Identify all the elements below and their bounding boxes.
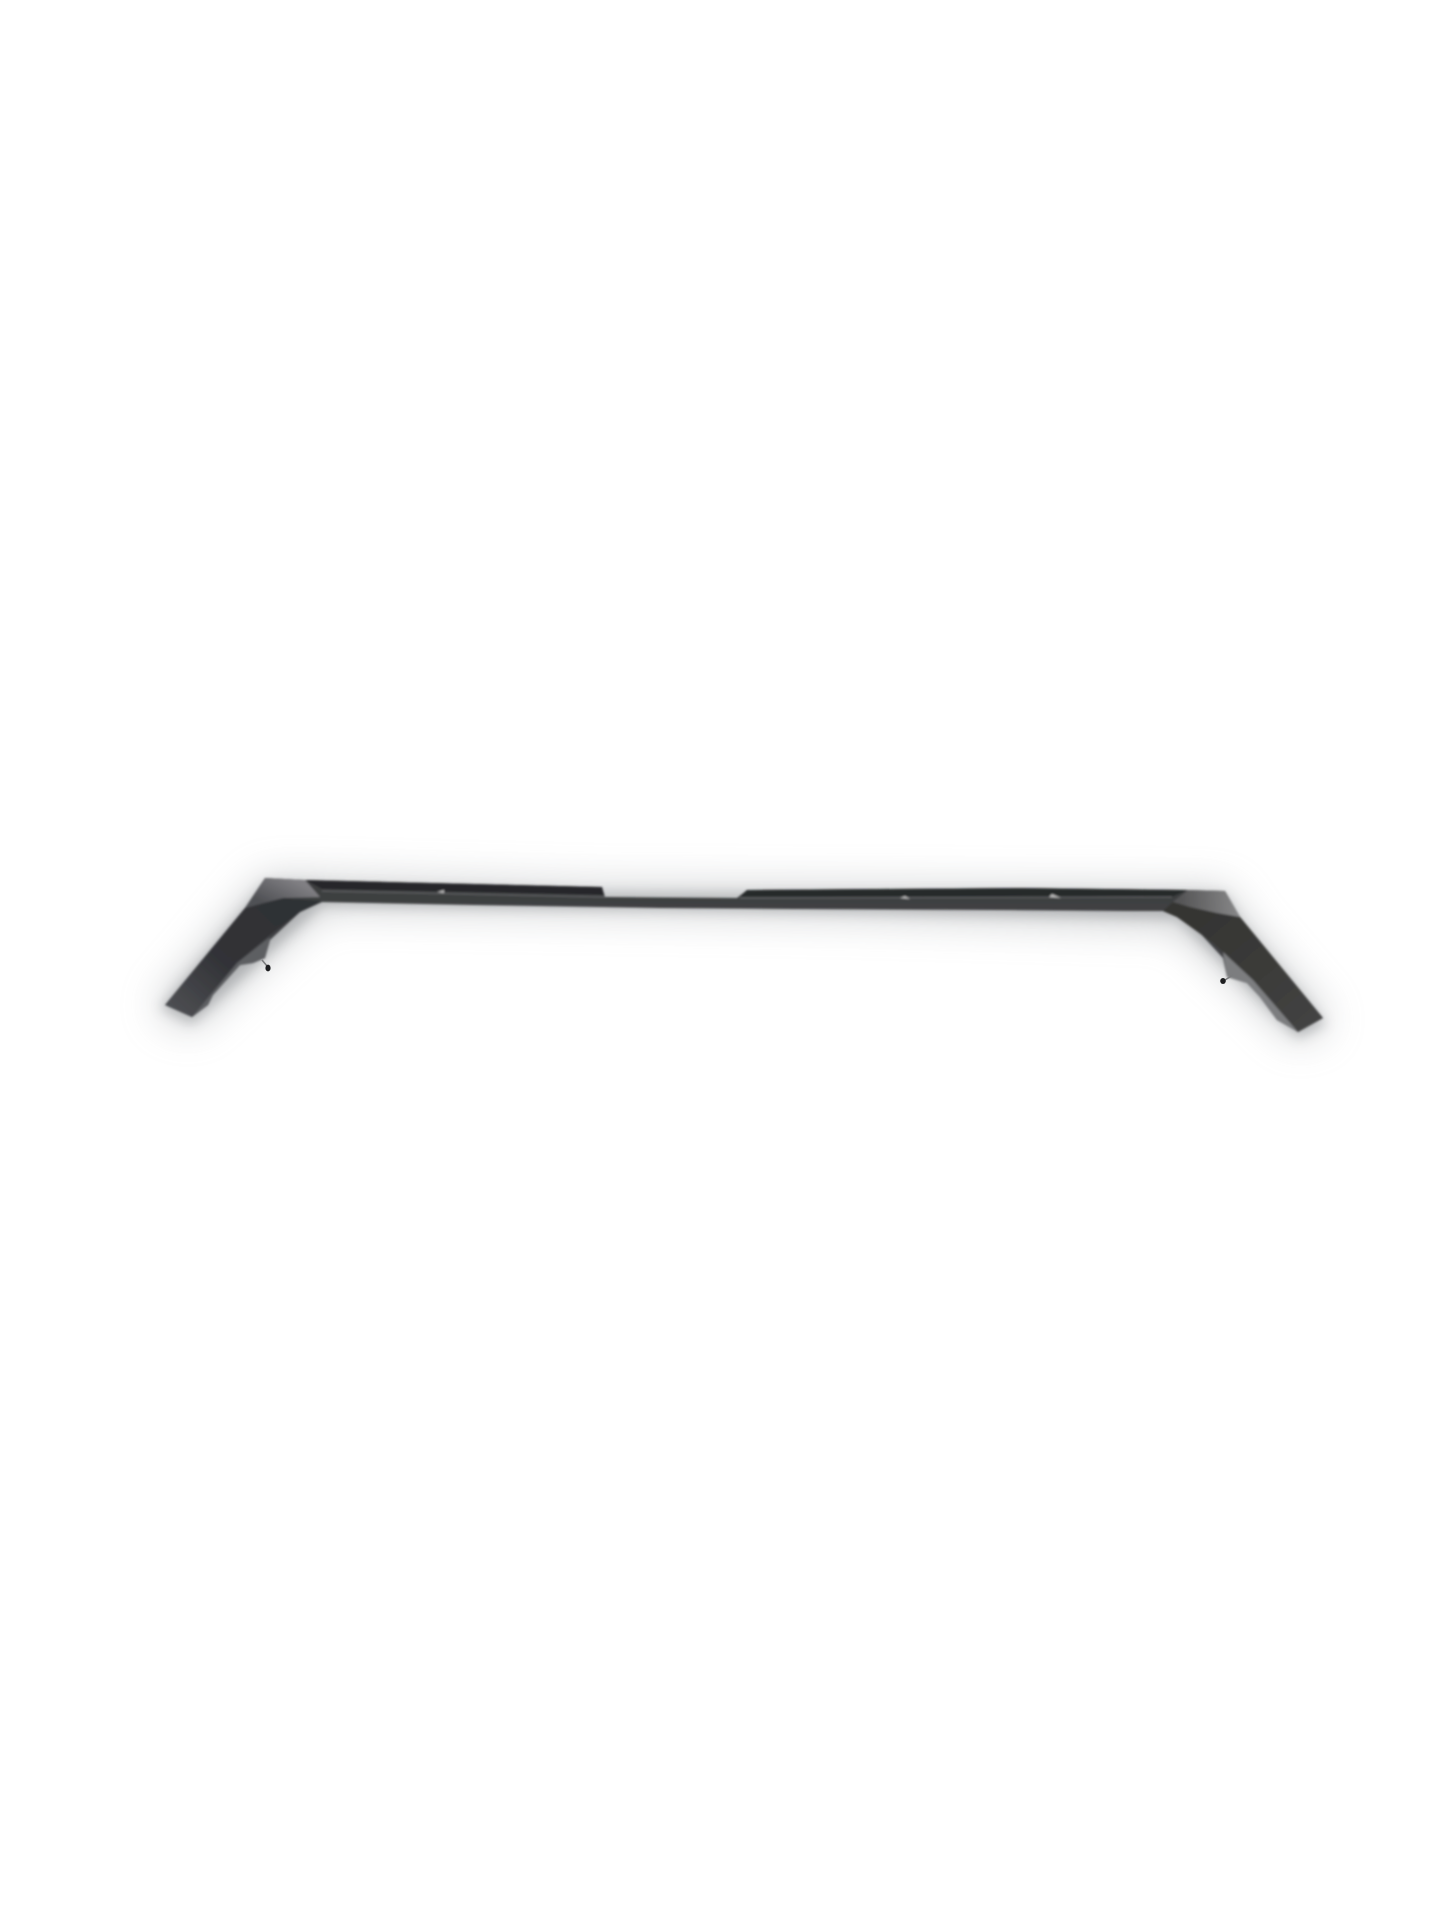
left arm flange (192, 937, 270, 1017)
soft shadow (155, 878, 1330, 1042)
trim bar (165, 878, 1323, 1032)
highlights (322, 891, 1172, 898)
clip markers (437, 890, 1061, 899)
right wire clip (1220, 975, 1233, 984)
left gloss (245, 878, 320, 908)
left groove (305, 880, 604, 895)
right gloss (1173, 890, 1240, 917)
bar body (165, 878, 1323, 1032)
left wire clip (262, 960, 271, 971)
left arm dark face (165, 898, 322, 1017)
right arm dark face (1163, 902, 1323, 1032)
right arm flange (1223, 952, 1298, 1032)
right groove (740, 888, 1188, 897)
